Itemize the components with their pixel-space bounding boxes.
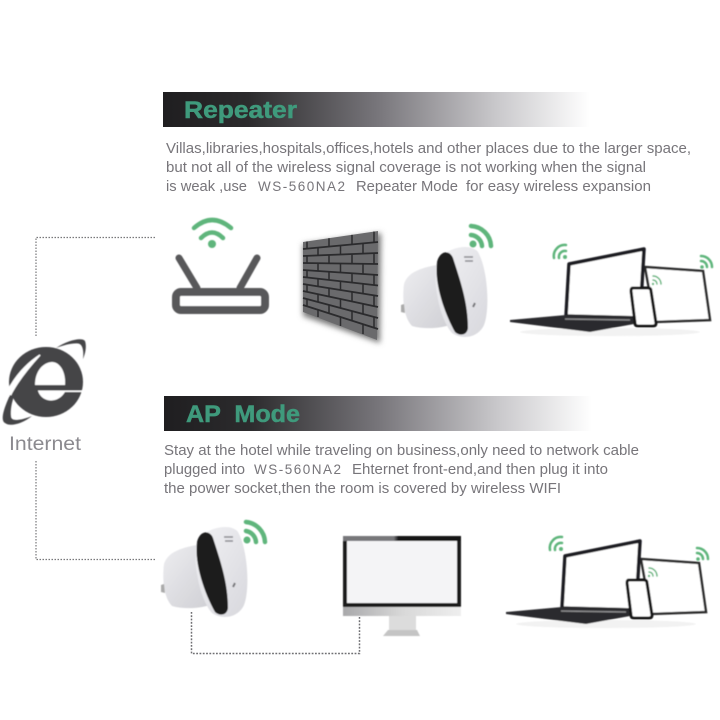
image: AP mode laptop, tablet and phone xyxy=(506,537,708,628)
image: brick wall xyxy=(303,231,381,343)
text block: repeater description: but not all of the wireless signal coverage is not working when the signal xyxy=(166,160,646,176)
heading: Repeater xyxy=(163,92,590,127)
dotted line: internet to AP section xyxy=(36,461,155,560)
image: repeater device xyxy=(401,226,491,337)
dotted line: internet to repeater section xyxy=(36,238,155,336)
text block: AP mode description: Stay at the hotel while traveling on business,only need to network cable xyxy=(164,443,639,459)
text block: AP mode description: the power socket,then the room is covered by wireless WIFI xyxy=(164,481,561,497)
image: desktop monitor xyxy=(343,536,461,636)
text block: repeater description: Villas,libraries,hospitals,offices,hotels and other places due to the larger space, xyxy=(166,141,691,157)
text block: repeater description xyxy=(166,141,691,195)
heading: AP Mode xyxy=(164,396,592,431)
text block: repeater description: is weak ,use xyxy=(166,179,247,195)
image: laptop, tablet and phone receiving wifi xyxy=(510,245,712,336)
icon: internet logo xyxy=(3,339,86,425)
icon: wifi router xyxy=(176,220,265,310)
text block: AP mode description: plugged into xyxy=(164,462,245,478)
heading: AP Mode: AP Mode xyxy=(186,401,300,428)
text block: repeater description: Repeater Mode xyxy=(356,179,458,195)
text block: repeater description: WS-560NA2 xyxy=(258,179,345,194)
dotted line: ethernet cable xyxy=(192,612,360,654)
image: AP mode repeater device xyxy=(161,522,265,617)
text block: AP mode description: Ehternet front-end,and then plug it into xyxy=(352,462,608,478)
text block: repeater description: for easy wireless expansion xyxy=(466,179,651,195)
text block: AP mode description xyxy=(164,443,639,497)
label: Internet: Internet xyxy=(9,434,82,455)
heading: Repeater: Repeater xyxy=(184,97,297,124)
text block: AP mode description: WS-560NA2 xyxy=(254,462,341,477)
